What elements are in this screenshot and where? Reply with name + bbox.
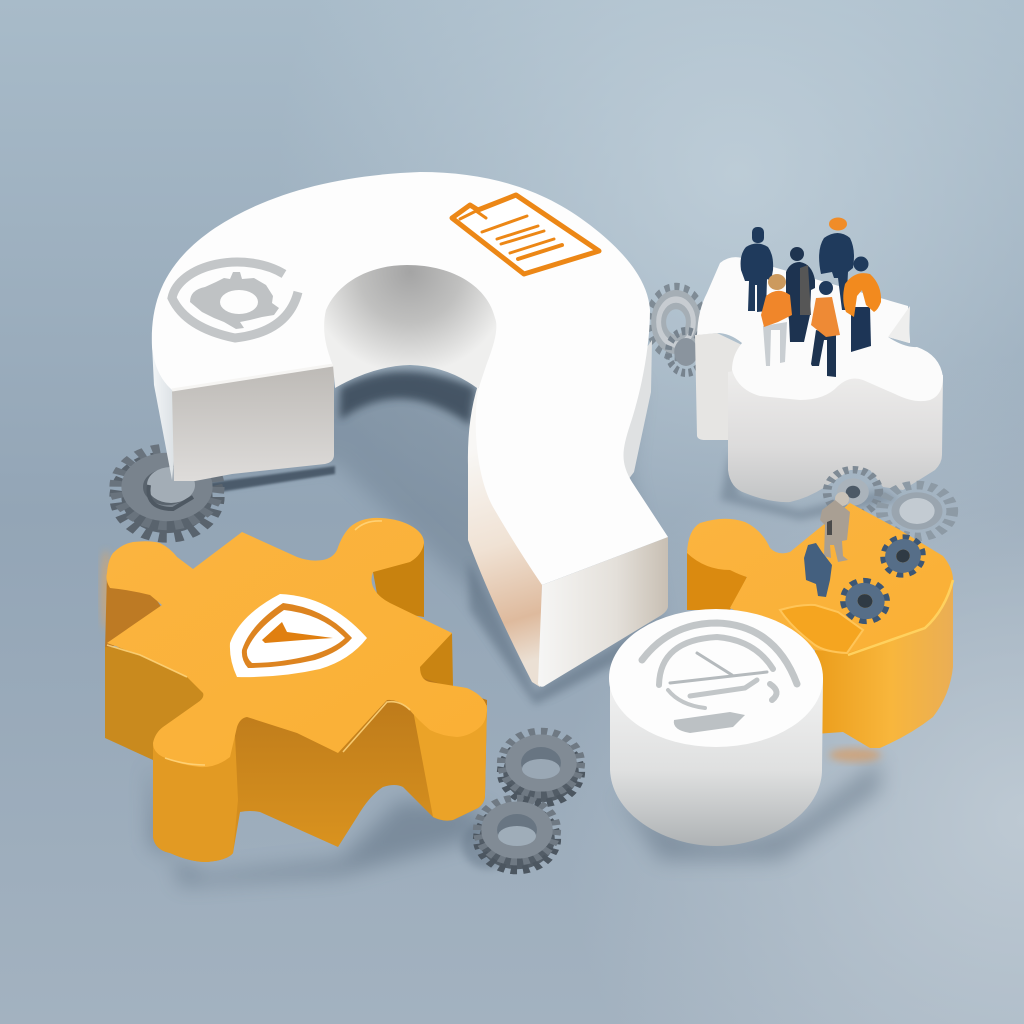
figure: navy back with orange cap <box>819 218 854 310</box>
figure: orange right <box>843 256 881 352</box>
icon: gauge on cylinder <box>642 623 797 733</box>
question mark: inner arch wall <box>318 262 505 388</box>
yellow left: bright lobe right <box>412 705 487 821</box>
team of figures <box>741 218 881 377</box>
gear: centre bottom upper <box>502 732 580 803</box>
small figure: blue seated <box>804 543 832 597</box>
figure: dark centre <box>786 247 815 342</box>
yellow left: notch wall upper right <box>373 543 424 617</box>
yellow left: notch wall right <box>415 633 453 686</box>
yellow left: bright lobe left <box>153 735 238 862</box>
yellow left: left glow <box>101 550 111 630</box>
white puzzle: back right wall <box>888 306 910 343</box>
yellow left: back tab side <box>105 573 170 650</box>
yellow right: side wall <box>815 578 953 748</box>
icon: orange clipboard on question mark <box>452 195 599 274</box>
question mark: left foot side <box>152 345 180 480</box>
right yellow puzzle piece <box>687 503 953 762</box>
yellow left: rim highlights <box>107 521 410 765</box>
small figure: grey engineer <box>820 492 850 562</box>
icon: gear in ring on question mark <box>172 262 298 338</box>
yellow left: left wall <box>105 647 215 760</box>
gear: lower right of question mark back <box>668 331 704 373</box>
yellow right: back tab side <box>687 550 747 610</box>
question mark: tail left face <box>468 385 542 687</box>
cylinder: top <box>609 609 823 747</box>
white puzzle: main side wall <box>728 365 943 502</box>
white puzzle: top face <box>697 257 943 401</box>
yellow left: top face <box>106 518 487 767</box>
yellow right: notch <box>780 605 863 653</box>
gear: centre bottom lower <box>478 799 556 870</box>
white puzzle: back tab side <box>695 333 742 440</box>
gear: left, under question mark foot <box>118 450 216 536</box>
gear: behind right yellow piece, small <box>827 470 879 514</box>
left yellow puzzle piece <box>101 518 487 862</box>
question mark: foot front face <box>172 363 334 481</box>
figure: orange centre <box>811 281 840 377</box>
yellow left: front side walls <box>153 670 487 862</box>
gear: behind right yellow piece, large <box>882 485 952 537</box>
question mark <box>152 172 668 687</box>
white cylinder <box>609 609 823 846</box>
cylinder: side <box>610 678 823 846</box>
ground shadows <box>150 366 900 885</box>
yellow right: orange ground glow <box>829 748 881 762</box>
yellow right: top rim highlight <box>848 580 953 655</box>
question mark: top face <box>152 172 668 585</box>
question mark: tail front face <box>538 537 668 687</box>
question mark: right side strip <box>618 340 652 480</box>
icon: shield on left puzzle piece <box>230 594 367 677</box>
white puzzle piece with team <box>695 257 943 502</box>
figure: orange front left with silver legs <box>761 274 792 366</box>
icon: blue gear lower <box>840 578 890 624</box>
icon: blue gear upper <box>880 533 926 579</box>
yellow right: top face <box>687 503 953 653</box>
gear: behind question mark, right <box>650 288 702 356</box>
figure: navy left <box>741 227 773 312</box>
question mark: top face soft edge highlight <box>172 365 333 390</box>
